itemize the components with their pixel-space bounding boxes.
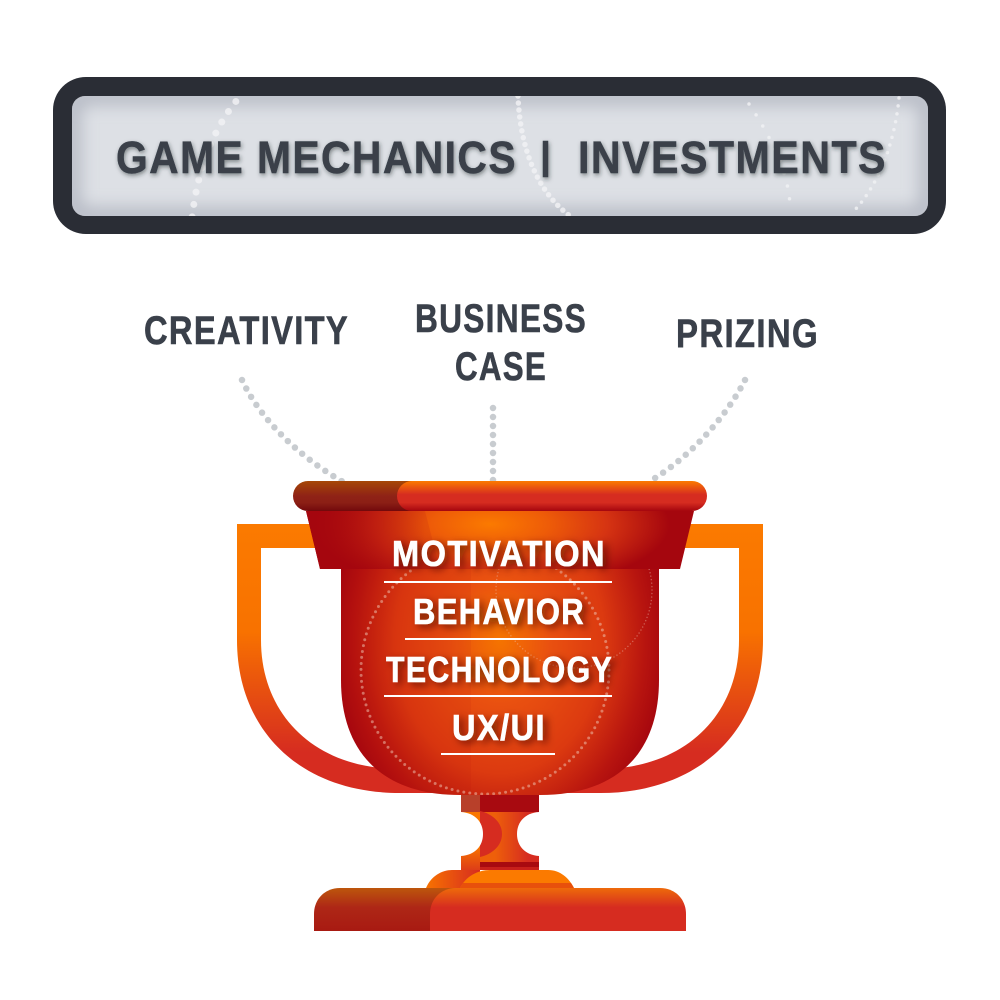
dotted connector: business case — [490, 408, 496, 482]
title text: GAME MECHANICS — [116, 132, 517, 183]
banner frame — [53, 77, 946, 234]
title text — [116, 132, 887, 183]
item: ux/ui: UX/UI — [452, 707, 546, 748]
trophy — [237, 481, 763, 931]
right handle — [530, 524, 763, 793]
left handle — [237, 524, 470, 793]
item: motivation: MOTIVATION — [392, 533, 606, 574]
label: business case: CASE — [455, 345, 547, 389]
label: creativity: CREATIVITY — [144, 309, 349, 353]
rim — [293, 481, 707, 511]
bowl — [341, 569, 659, 795]
label: business case: BUSINESS — [415, 297, 587, 341]
dotted connector: creativity — [242, 380, 345, 483]
item: technology: TECHNOLOGY — [386, 649, 613, 690]
label: prizing: PRIZING — [676, 312, 819, 356]
foot — [426, 870, 574, 888]
cup list — [384, 533, 613, 755]
dotted circles on bowl — [360, 569, 653, 795]
label: business case — [415, 297, 587, 389]
banner panel — [72, 92, 928, 218]
stem — [461, 794, 539, 870]
base — [314, 888, 686, 931]
title text: INVESTMENTS — [578, 132, 887, 183]
bowl flare — [306, 511, 694, 569]
dotted connector: prizing — [647, 380, 745, 483]
title banner — [53, 77, 946, 234]
item: behavior: BEHAVIOR — [413, 591, 585, 632]
